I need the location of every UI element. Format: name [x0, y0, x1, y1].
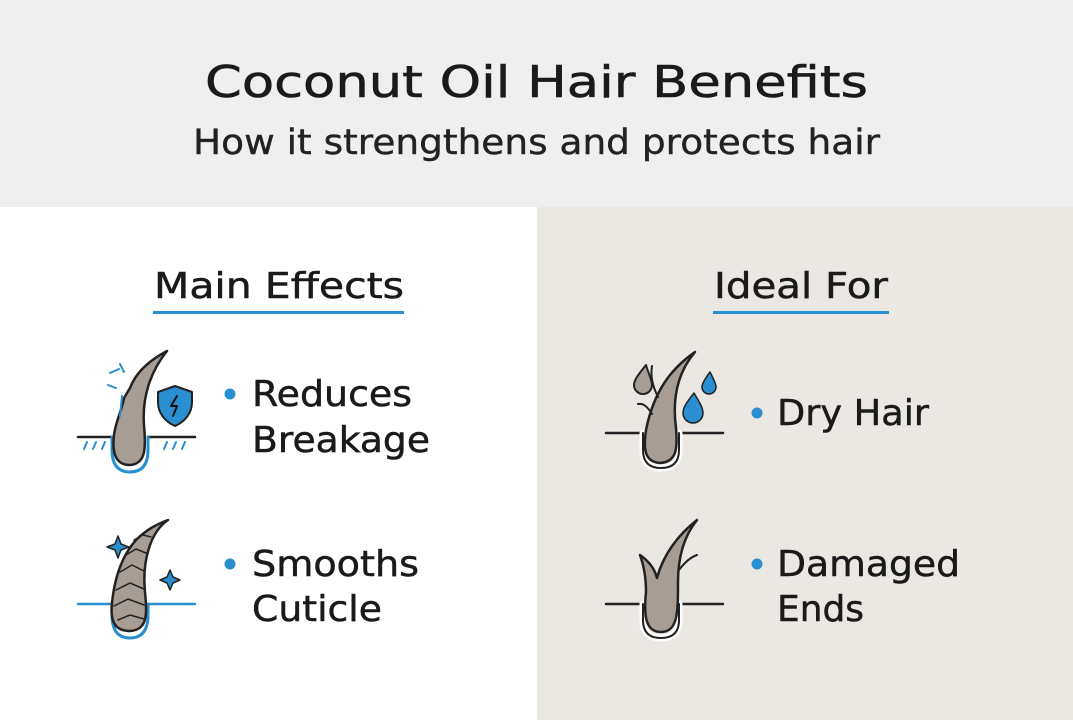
item: reduces breakage	[224, 374, 430, 461]
item: reduces breakage: Breakage	[252, 420, 430, 461]
item: damaged ends	[752, 544, 960, 630]
panel: ideal for	[606, 266, 960, 638]
icon: dry hair with drops	[606, 352, 723, 468]
subtitle: How it strengthens and protects hair	[193, 123, 881, 163]
item: damaged ends: Damaged	[777, 544, 960, 585]
panel: main effects	[78, 266, 430, 638]
icon: damaged ends	[606, 520, 723, 638]
icon: smooth cuticle	[78, 520, 195, 638]
heading: main effects: Main Effects	[154, 266, 404, 307]
item: smooths cuticle	[224, 544, 419, 630]
item: dry hair: Dry Hair	[777, 393, 929, 434]
item: damaged ends: Ends	[777, 589, 864, 630]
title: Coconut Oil Hair Benefits	[205, 57, 868, 108]
item: smooths cuticle: Cuticle	[252, 589, 382, 630]
header	[193, 57, 881, 163]
item: reduces breakage: Reduces	[252, 374, 412, 415]
heading: ideal for: Ideal For	[714, 266, 888, 307]
icon: hair breakage shield	[78, 351, 195, 472]
item: smooths cuticle: Smooths	[252, 544, 419, 585]
